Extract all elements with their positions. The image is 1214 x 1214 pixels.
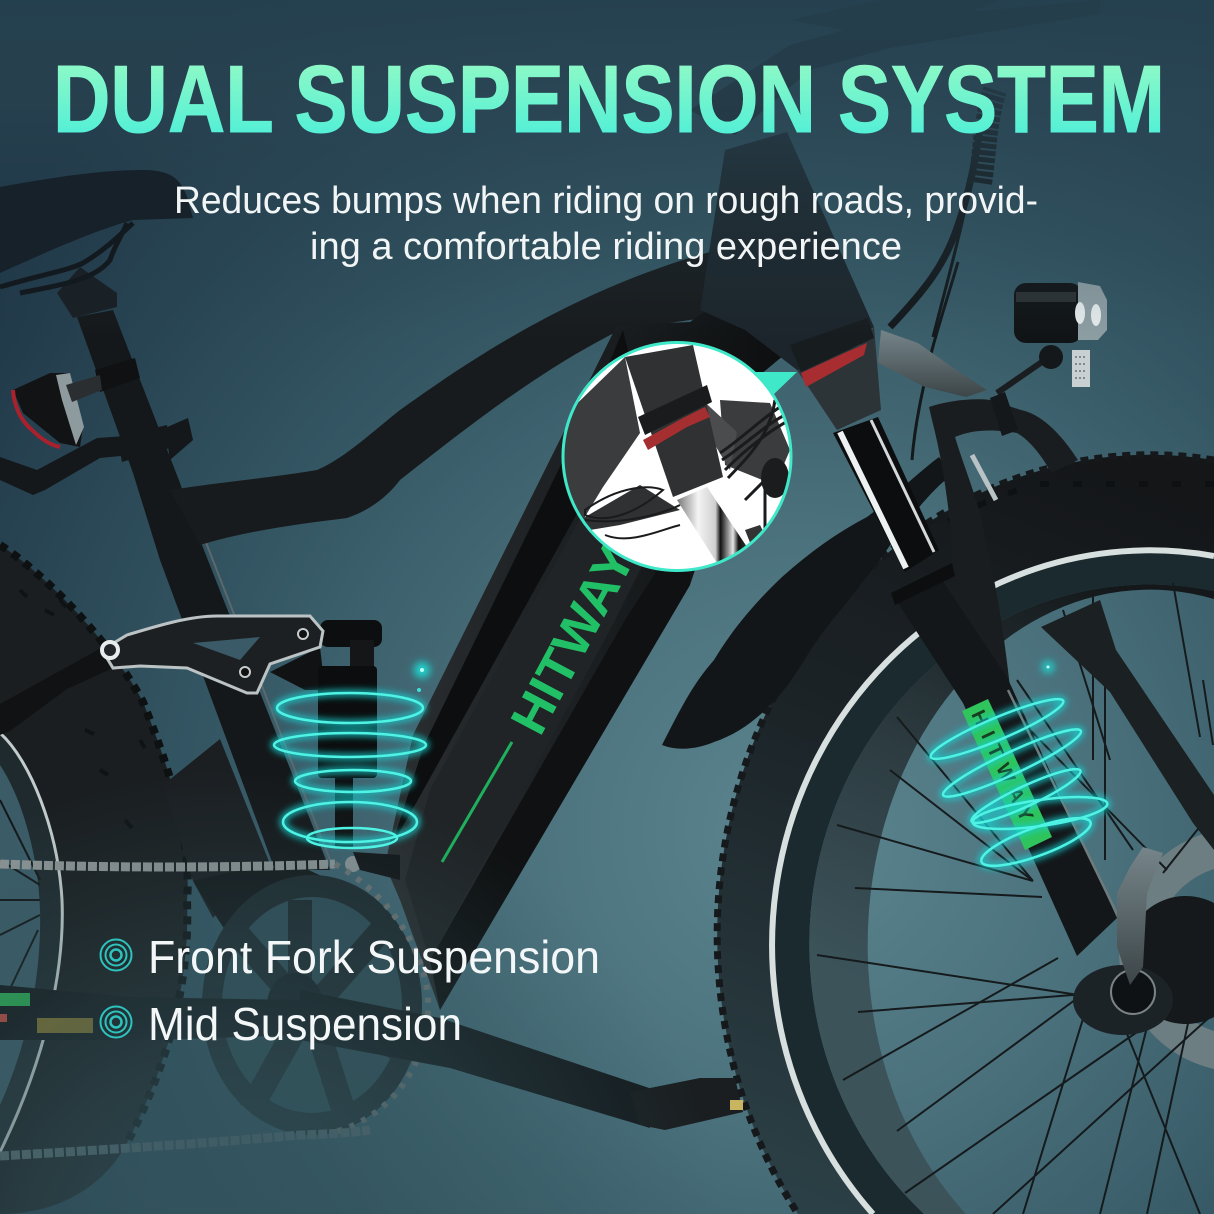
top tube [170,248,760,545]
front tyre [717,455,1214,1214]
fork stanchion [833,417,939,572]
tyre tread marks [915,484,1214,545]
top fog [0,0,1214,340]
rear stay [0,647,113,735]
handlebar and stem [690,0,1100,135]
inset magnifier: fork detail [560,342,797,570]
battery downtube [353,300,790,1010]
seat post [77,310,330,870]
chain [0,864,428,1156]
fork lower leg [891,563,1120,956]
shock rocker linkage [102,616,323,693]
fork crown [790,318,881,430]
spokes [817,583,1213,1214]
bottom fog [0,770,730,1214]
seat collar [95,358,140,392]
brand name: HITWAY [499,535,646,743]
chainring [202,875,422,1135]
rear shock [270,620,382,872]
rear tyre [0,545,188,1214]
label: mid suspension: Mid Suspension [148,998,462,1050]
headlight [990,282,1107,436]
icon: target bullet 2 [100,1006,132,1038]
rear rack bracket [0,418,193,495]
fork sticker [962,699,1052,850]
subtitle [174,180,1038,268]
feature list [100,931,600,1050]
brand stripe [442,742,512,862]
icon: target bullet 1 [100,940,132,970]
right fork blade [1041,600,1214,850]
chain stay lower [193,866,330,930]
disc brake rotor [1119,831,1214,1069]
mudguard bracket [878,330,987,397]
brake caliper arm [1117,847,1163,985]
front fork glow rings [926,661,1109,875]
fork sticker: HITWAY [966,707,1037,825]
fender [662,457,952,749]
subtitle: Reduces bumps when riding on rough roads, provid- [174,180,1038,222]
rear light [13,373,102,447]
left crank and pedal [0,985,305,1040]
saddle with rails [0,170,193,318]
label: front fork suspension: Front Fork Suspension [148,931,600,983]
rear shock glow rings [274,662,430,848]
rear controller box [163,739,270,918]
brake cables [890,90,995,460]
right pedal [630,1078,743,1130]
crank arm [300,990,655,1128]
subtitle: ing a comfortable riding experience [310,226,902,268]
fork arch brace [929,399,1078,703]
rear mudguard strut [972,455,996,500]
head tube [700,132,874,373]
hub [1073,896,1214,1035]
